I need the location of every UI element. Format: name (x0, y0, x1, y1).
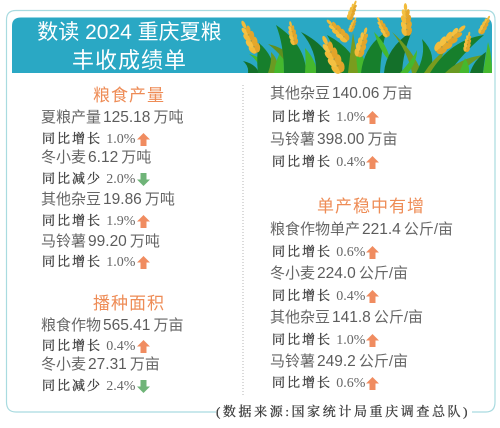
row: 马铃薯: 马铃薯398.00万亩 (270, 131, 397, 148)
row: 其他杂豆: 其他杂豆141.8公斤/亩 (270, 309, 423, 326)
heading: 粮食产量: 粮食产量 (93, 86, 165, 105)
row: 同比减少 2.0%: 同比减少 2.0% (42, 171, 135, 187)
title: 数读 2024 重庆夏粮 (37, 21, 222, 44)
row: 其他杂豆: 其他杂豆19.86万吨 (41, 191, 175, 208)
row: 粮食作物: 粮食作物565.41万亩 (41, 317, 183, 334)
row: 同比增长 1.0%: 同比增长 1.0% (42, 254, 135, 270)
row: 其他杂豆: 其他杂豆140.06万亩 (270, 85, 412, 102)
row: 冬小麦: 冬小麦224.0公斤/亩 (270, 265, 408, 282)
row: 马铃薯: 马铃薯99.20万吨 (41, 233, 160, 250)
row: 冬小麦: 冬小麦6.12万吨 (41, 149, 151, 166)
row: 同比增长 1.0%: 同比增长 1.0% (272, 109, 365, 125)
title (37, 21, 222, 73)
row: 粮食作物单产: 粮食作物单产221.4公斤/亩 (270, 221, 453, 238)
row: 冬小麦: 冬小麦27.31万亩 (41, 356, 160, 373)
row: 同比增长 0.4%: 同比增长 0.4% (272, 154, 365, 170)
source note: (数据来源:国家统计局重庆调查总队) (216, 404, 470, 419)
heading: 单产稳中有增: 单产稳中有增 (317, 197, 425, 216)
title: 丰收成绩单 (72, 48, 187, 73)
row: 同比增长 0.4%: 同比增长 0.4% (42, 338, 135, 354)
row: 同比增长 0.6%: 同比增长 0.6% (272, 375, 365, 391)
heading: 播种面积: 播种面积 (93, 294, 165, 313)
header banner (12, 0, 492, 74)
row: 夏粮产量: 夏粮产量125.18万吨 (41, 109, 183, 126)
row: 同比减少 2.4%: 同比减少 2.4% (42, 378, 135, 394)
row: 同比增长 1.0%: 同比增长 1.0% (42, 131, 135, 147)
row: 同比增长 0.4%: 同比增长 0.4% (272, 288, 365, 304)
row: 同比增长 0.6%: 同比增长 0.6% (272, 244, 365, 260)
row: 同比增长 1.9%: 同比增长 1.9% (42, 213, 135, 229)
row: 马铃薯: 马铃薯249.2公斤/亩 (270, 353, 408, 370)
wheat illustration (236, 0, 493, 77)
row: 同比增长 1.0%: 同比增长 1.0% (272, 332, 365, 348)
